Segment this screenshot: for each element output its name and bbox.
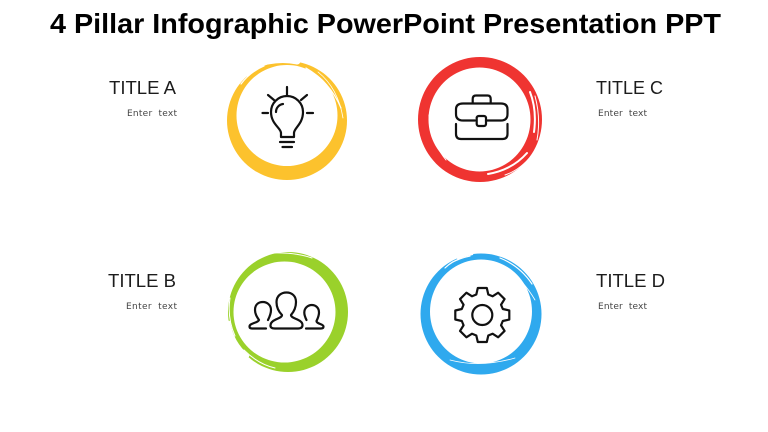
pillar A: title and text: Enter text: [127, 109, 177, 119]
pillar B: title and text: Enter text: [126, 302, 177, 312]
pillar A: title and text: [109, 77, 177, 119]
pillar B: title and text: [108, 270, 177, 312]
pillar D: title and text: [596, 270, 665, 312]
pillar A: lightbulb icon: [262, 87, 313, 147]
pillar C: red brush ring: [418, 57, 542, 182]
pillar C: title and text: TITLE C: [596, 77, 663, 98]
pillar B: green brush ring: [228, 252, 348, 372]
pillar B: title and text: TITLE B: [108, 270, 176, 291]
pillar A: yellow brush ring: [227, 60, 347, 180]
pillar D: gear icon: [455, 288, 509, 342]
pillar D: title and text: Enter text: [598, 302, 647, 312]
pillar C: title and text: [596, 77, 663, 119]
pillar A: title and text: TITLE A: [109, 77, 177, 98]
pillar C: briefcase icon: [456, 96, 508, 139]
pillar D: blue brush ring: [421, 254, 542, 374]
pillar C: title and text: Enter text: [598, 109, 647, 119]
title: 4 Pillar Infographic PowerPoint Presentation PPT: [50, 8, 721, 39]
pillar D: title and text: TITLE D: [596, 270, 665, 291]
pillar B: people icon: [250, 292, 324, 328]
